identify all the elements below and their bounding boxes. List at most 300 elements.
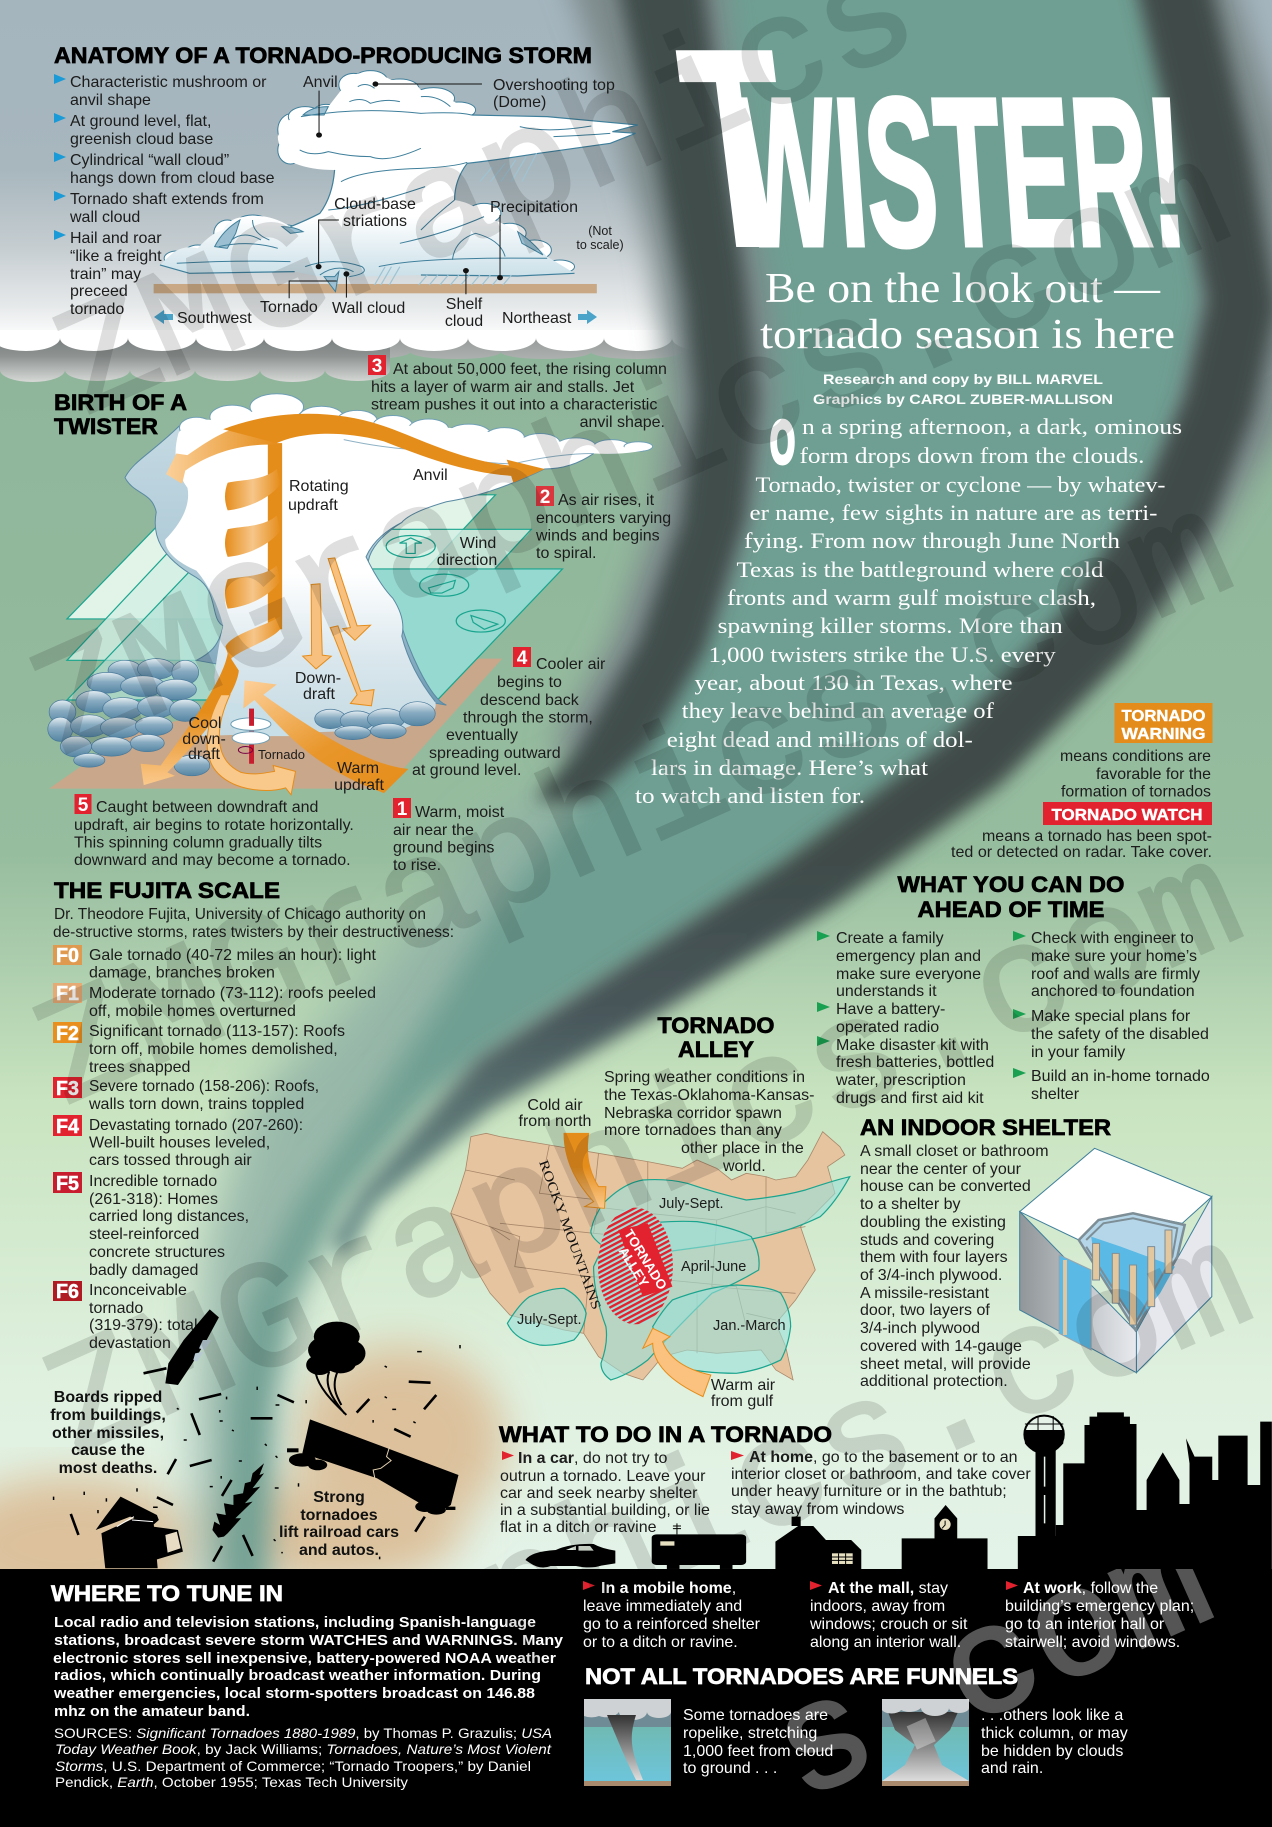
- icon: thick column tornado: [882, 1699, 969, 1786]
- panel: the Fujita scale: [53, 878, 454, 1352]
- F6: tornado: [89, 1300, 143, 1317]
- map: United States: [451, 1132, 850, 1397]
- caption: boards: from buildings,: [50, 1407, 166, 1424]
- F5: carried long distances,: [89, 1208, 249, 1225]
- intro story text: to watch and listen for.: [635, 783, 865, 808]
- diagram labels: striations: [343, 213, 407, 230]
- advice: at the mall: indoors, away from: [810, 1598, 945, 1615]
- text: indoor shelter: additional protection.: [860, 1373, 1008, 1390]
- step 1: air near the: [393, 822, 474, 839]
- text: thick column: [981, 1707, 1128, 1777]
- step 4: eventually: [446, 727, 518, 744]
- list column two: Build an in-home tornado: [1031, 1068, 1210, 1085]
- heading: tornado alley: ALLEY: [678, 1037, 754, 1062]
- caption: boards: most deaths.: [59, 1460, 157, 1477]
- text: ropelike: ropelike, stretching: [683, 1725, 817, 1742]
- advice: in a car: In a car, do not try to: [518, 1450, 668, 1467]
- subtitle: Be on the look out —: [765, 266, 1161, 312]
- list column two: in your family: [1031, 1044, 1125, 1061]
- diagram labels: Anvil: [413, 467, 448, 484]
- heading: birth of a twister: [54, 390, 187, 439]
- F6: F6: [56, 1281, 79, 1303]
- step 1: ground begins: [393, 840, 494, 856]
- list column one: Make disaster kit with: [836, 1037, 989, 1054]
- step 2: winds and begins: [535, 528, 660, 544]
- F6: devastation: [89, 1335, 171, 1352]
- map labels: [517, 1097, 786, 1410]
- panel: tornado warning and watch: means a tornado has been spot-: [982, 828, 1212, 845]
- watermark: ZMGraphics.com: [13, 466, 1258, 1147]
- map labels: Cold air: [527, 1097, 583, 1114]
- diagram labels: Tornado: [260, 299, 318, 316]
- F0: F0: [56, 945, 79, 967]
- list column two: roof and walls are firmly: [1031, 966, 1200, 983]
- map labels: from north: [519, 1113, 591, 1130]
- advice: in a car: car and seek nearby shelter: [500, 1485, 698, 1502]
- list column two: Make special plans for: [1031, 1008, 1191, 1025]
- step 3: [368, 355, 667, 431]
- heading: not all tornadoes: NOT ALL TORNADOES ARE FUNNELS: [585, 1664, 1018, 1689]
- F0: damage, branches broken: [89, 964, 275, 982]
- panel: anatomy of a tornado-producing storm: [54, 43, 638, 330]
- black footer band: [0, 1569, 1272, 1827]
- text: indoor shelter: to a shelter by: [860, 1196, 960, 1213]
- diagram labels: draft: [188, 746, 221, 763]
- bullet list: storm signs: Tornado shaft extends from: [70, 191, 264, 208]
- intro story text: spawning killer storms. More than: [718, 613, 1063, 638]
- advice: in a car: flat in a ditch or ravine: [500, 1519, 657, 1536]
- intro story text: n a spring afternoon, a dark, ominous: [802, 414, 1182, 439]
- step 5: This spinning column gradually tilts: [74, 834, 322, 852]
- map labels: July-Sept.: [517, 1312, 581, 1328]
- bullet list: storm signs: wall cloud: [69, 209, 140, 226]
- text: tornado alley: [604, 1069, 814, 1175]
- diagram labels: to scale): [576, 238, 624, 252]
- panel: tornado warning and watch: formation of tornados: [1061, 784, 1211, 800]
- intro story text: Tornado, twister or cyclone — by whatev-: [756, 472, 1166, 497]
- icon: ropelike tornado: [584, 1699, 671, 1786]
- bullet list: storm signs: greenish cloud base: [70, 131, 213, 148]
- F3: [53, 1077, 319, 1113]
- F2: torn off, mobile homes demolished,: [89, 1041, 338, 1058]
- F3: Severe tornado (158-206): Roofs,: [89, 1078, 319, 1095]
- text: indoor shelter: covered with 14-gauge: [860, 1338, 1022, 1355]
- panel: where to tune in: [51, 1581, 564, 1790]
- heading: birth of a twister: BIRTH OF A: [54, 390, 187, 415]
- text: tornado alley: Spring weather conditions in: [604, 1069, 805, 1086]
- intro story text: fronts and warm gulf moisture clash,: [727, 585, 1096, 610]
- F3: walls torn down, trains toppled: [88, 1096, 304, 1113]
- diagram labels: draft: [303, 686, 336, 703]
- panel: what to do in a tornado: [499, 1412, 1272, 1569]
- advice: in a car: [500, 1450, 710, 1536]
- step 3: hits a layer of warm air and stalls. Jet: [371, 379, 635, 396]
- step 4: [412, 647, 606, 779]
- F6: (319-379): total: [89, 1317, 198, 1334]
- intro text: [53, 906, 454, 941]
- F5: Incredible tornado: [89, 1173, 217, 1190]
- step 3: anvil shape.: [580, 414, 665, 431]
- diagram labels: direction: [437, 552, 497, 569]
- step 5: 5: [78, 795, 89, 816]
- panel: what you can do ahead of time: [817, 872, 1210, 1107]
- caption: boards: other missiles,: [52, 1425, 164, 1442]
- advice: at the mall: [809, 1580, 968, 1651]
- text: thick column: . . .others look like a: [981, 1707, 1123, 1724]
- F2: F2: [56, 1023, 79, 1045]
- intro story text: fying. From now through June North: [744, 528, 1120, 553]
- bullet list: storm signs: Cylindrical “wall cloud”: [70, 152, 229, 169]
- F1: F1: [56, 983, 79, 1005]
- bullet list: storm signs: Characteristic mushroom or: [70, 74, 267, 91]
- text: sources: Today Weather Book , by Jack Williams; Tornadoes, Nature’s Most Violent: [55, 1741, 552, 1757]
- advice: in a mobile home: leave immediately and: [583, 1598, 742, 1615]
- text: tornado alley: world.: [722, 1158, 766, 1175]
- map labels: ROCKY MOUNTAINS: [536, 1158, 604, 1311]
- step 4: spreading outward: [429, 745, 561, 762]
- advice: in a mobile home: [583, 1580, 761, 1651]
- advice: in a mobile home: or to a ditch or ravine.: [583, 1634, 738, 1651]
- bullet list: storm signs: train” may: [70, 266, 141, 283]
- heading: what you can do: [898, 872, 1124, 922]
- diagram labels: Overshooting top: [493, 77, 615, 94]
- credits: Research and copy by BILL MARVEL: [823, 371, 1104, 387]
- advice: at home: [731, 1449, 1031, 1518]
- F5: steel-reinforced: [89, 1226, 199, 1243]
- F5: badly damaged: [89, 1262, 198, 1279]
- text: indoor shelter: A missile-resistant: [860, 1285, 989, 1302]
- step 3: At about 50,000 feet, the rising column: [393, 361, 667, 378]
- advice: at home: stay away from windows: [731, 1501, 904, 1518]
- list column one: operated radio: [836, 1019, 939, 1036]
- credits: Graphics by CAROL ZUBER-MALLISON: [813, 391, 1113, 407]
- F0: Gale tornado (40-72 miles an hour): light: [89, 947, 377, 964]
- diagram: storm cloud cross-section: [154, 71, 638, 298]
- diagram labels: down-: [182, 731, 226, 748]
- list column two: Check with engineer to: [1031, 930, 1194, 947]
- step 3: stream pushes it out into a characteristic: [371, 396, 657, 414]
- F2: Significant tornado (113-157): Roofs: [89, 1023, 345, 1040]
- step 5: [74, 794, 354, 869]
- diagram labels: (Dome): [493, 94, 546, 111]
- intro story text: Texas is the battleground where cold: [736, 557, 1104, 582]
- text: indoor shelter: doubling the existing: [860, 1214, 1006, 1231]
- F5: concrete structures: [89, 1244, 225, 1261]
- heading: what to do: WHAT TO DO IN A TORNADO: [499, 1422, 832, 1447]
- intro story text: [635, 409, 1182, 808]
- list column two: make sure your home’s: [1031, 948, 1197, 965]
- text: indoor shelter: studs and covering: [860, 1232, 994, 1249]
- F4: cars tossed through air: [89, 1152, 252, 1169]
- bullet list: storm signs: [54, 74, 275, 318]
- advice: at work: stairwell; avoid windows.: [1005, 1634, 1180, 1651]
- tornado warning label: TORNADO: [1122, 708, 1206, 725]
- panel: birth of a twister: [48, 355, 671, 874]
- text: radio and television stations: Local radio and television stations, including Spanish-language: [54, 1614, 536, 1631]
- text: ropelike: [683, 1707, 833, 1777]
- text: indoor shelter: A small closet or bathroom: [860, 1143, 1049, 1160]
- advice: at the mall: windows; crouch or sit: [809, 1616, 968, 1633]
- text: ropelike: to ground . . .: [683, 1760, 777, 1777]
- heading: tornado alley: [658, 1013, 774, 1062]
- diagram labels: updraft: [288, 497, 338, 514]
- title: Twister!: [666, 0, 1192, 308]
- label on map: tornado alley: TORNADO: [621, 1227, 670, 1292]
- diagram labels: updraft: [334, 777, 384, 794]
- text: thick column: be hidden by clouds: [981, 1743, 1123, 1760]
- map labels: April-June: [681, 1259, 746, 1275]
- intro story text: O: [770, 409, 795, 476]
- step 1: to rise.: [393, 857, 441, 874]
- diagram: rotating storm: [48, 394, 653, 795]
- caption: boards: cause the: [71, 1442, 145, 1459]
- advice: in a car: outrun a tornado. Leave your: [500, 1468, 706, 1485]
- tornado warning label: [1114, 703, 1212, 743]
- diagram labels: Wind: [460, 535, 496, 552]
- illustration: flying debris: [50, 1309, 460, 1568]
- step 4: begins to: [497, 674, 562, 691]
- text: tornado alley: more tornadoes than any: [604, 1122, 782, 1139]
- credits: [813, 371, 1113, 407]
- list column two: [1013, 930, 1210, 1103]
- text: radio and television stations: electronic stores sell inexpensive, battery-powered NOAA weather: [53, 1650, 556, 1667]
- step 2: As air rises, it: [558, 492, 655, 509]
- text: sources: SOURCES: Significant Tornadoes 1880-1989 , by Thomas P. Grazulis; USA: [54, 1725, 552, 1741]
- intro story text: lars in damage. Here’s what: [651, 755, 928, 780]
- bullet list: storm signs: At ground level, flat,: [70, 113, 211, 130]
- diagram labels: [154, 74, 624, 330]
- step 4: 4: [517, 648, 528, 669]
- list column one: [817, 930, 994, 1107]
- list column one: water, prescription: [835, 1072, 966, 1089]
- diagram labels: Anvil: [303, 74, 338, 91]
- step 1: [393, 798, 505, 874]
- diagram labels: Warm: [337, 760, 379, 777]
- subtitle: tornado season is here: [760, 312, 1175, 358]
- F2: [53, 1022, 345, 1076]
- diagram labels: Rotating: [289, 478, 349, 495]
- F5: F5: [56, 1173, 79, 1195]
- panel: tornado warning and watch: ted or detected on radar. Take cover.: [951, 844, 1212, 861]
- heading: indoor shelter: AN INDOOR SHELTER: [860, 1115, 1111, 1140]
- F0: [53, 945, 377, 982]
- illustration: vehicles and city skyline: [525, 1412, 1272, 1569]
- text: radio and television stations: radios, which continually broadcast weather information. During: [54, 1667, 541, 1684]
- text: radio and television stations: weather emergencies, local storm-spotters broadcast on 146.88: [53, 1685, 535, 1702]
- tornado watch label: TORNADO WATCH: [1052, 807, 1202, 824]
- diagram labels: Tornado: [258, 747, 305, 762]
- text: sources: [54, 1725, 552, 1790]
- diagram labels: Wall cloud: [332, 300, 405, 317]
- advice: at the mall: along an interior wall.: [810, 1634, 961, 1651]
- text: indoor shelter: them with four layers: [860, 1249, 1008, 1266]
- watermark: phics.com: [452, 1198, 1272, 1692]
- diagram labels: Precipitation: [490, 199, 578, 216]
- diagram labels: Shelf: [446, 296, 483, 313]
- list column one: Have a battery-: [836, 1001, 945, 1018]
- text: indoor shelter: of 3/4-inch plywood.: [860, 1267, 1002, 1284]
- text: indoor shelter: door, two layers of: [860, 1302, 990, 1319]
- step 1: 1: [397, 799, 408, 820]
- tornado warning label: WARNING: [1122, 726, 1206, 743]
- F5: [53, 1172, 249, 1279]
- heading: Fujita scale: THE FUJITA SCALE: [54, 878, 280, 903]
- advice: at home: under heavy furniture or in the bathtub;: [731, 1483, 1007, 1500]
- advice: at work: [1005, 1580, 1194, 1651]
- advice: at home: interior closet or bathroom, and take cover: [731, 1466, 1031, 1483]
- intro text: de-structive storms, rates twisters by their destructiveness:: [53, 924, 454, 941]
- panel: tornado warning and watch: favorable for the: [1096, 766, 1211, 783]
- diagram labels: (Not: [588, 224, 612, 238]
- step 4: descend back: [480, 692, 580, 709]
- F2: trees snapped: [89, 1059, 190, 1076]
- F4: [53, 1115, 303, 1169]
- caption: boards: Boards ripped: [54, 1389, 162, 1406]
- step 4: through the storm,: [463, 710, 593, 726]
- text: radio and television stations: stations, broadcast severe storm WATCHES and WARNINGS. Many: [54, 1632, 564, 1649]
- advice: at the mall: At the mall, stay: [828, 1580, 948, 1597]
- list column one: Create a family: [836, 930, 944, 947]
- map labels: Warm air: [711, 1377, 776, 1394]
- text: thick column: and rain.: [981, 1760, 1043, 1777]
- intro story text: 1,000 twisters strike the U.S. every: [709, 642, 1056, 667]
- panel: tornado alley: [451, 1013, 850, 1410]
- panel: an indoor shelter: [860, 1115, 1212, 1390]
- F4: F4: [56, 1116, 80, 1138]
- F1: [53, 983, 376, 1020]
- diagram labels: Cool: [189, 715, 221, 732]
- icons: car, tree, train, house, pine and boards: [54, 1309, 460, 1568]
- intro story text: they leave behind an average of: [682, 698, 995, 723]
- intro story text: eight dead and millions of dol-: [667, 727, 973, 752]
- text: indoor shelter: house can be converted: [860, 1178, 1031, 1195]
- text: thick column: thick column, or may: [981, 1725, 1128, 1742]
- watermark: ZMGraphics.com: [23, 816, 1268, 1497]
- list column one: fresh batteries, bottled: [836, 1054, 994, 1071]
- intro story text: er name, few sights in nature are as terri-: [750, 500, 1158, 525]
- F4: Well-built houses leveled,: [89, 1134, 270, 1152]
- bullet list: storm signs: hangs down from cloud base: [70, 170, 275, 187]
- text: tornado alley: other place in the: [681, 1140, 804, 1157]
- list column one: drugs and first aid kit: [836, 1090, 984, 1107]
- panel: tornado warning and watch: [951, 703, 1212, 861]
- step 5: updraft, air begins to rotate horizontally.: [74, 817, 354, 834]
- advice: at work: At work, follow the: [1023, 1580, 1158, 1597]
- list column two: anchored to foundation: [1031, 983, 1195, 1000]
- diagram labels: Southwest: [177, 310, 252, 327]
- step 5: downward and may become a tornado.: [74, 852, 351, 869]
- text: indoor shelter: [860, 1143, 1049, 1390]
- watermark: ZMGraphics.com: [10, 116, 1255, 797]
- tornado funnel: [195, 0, 1272, 1600]
- label on map: tornado alley: ALLEY: [616, 1244, 652, 1290]
- text: indoor shelter: 3/4-inch plywood: [860, 1320, 980, 1337]
- list column one: emergency plan and: [836, 948, 981, 965]
- step 3: 3: [372, 356, 382, 377]
- step 2: encounters varying: [536, 510, 671, 527]
- heading: anatomy: ANATOMY OF A TORNADO-PRODUCING STORM: [54, 43, 592, 68]
- intro story text: year, about 130 in Texas, where: [694, 670, 1012, 695]
- text: radio and television stations: [53, 1614, 564, 1720]
- list column two: shelter: [1031, 1086, 1080, 1103]
- advice: at home: At home, go to the basement or to an: [749, 1449, 1018, 1466]
- text: radio and television stations: mhz on the amateur band.: [54, 1703, 250, 1720]
- text: tornado alley: the Texas-Oklahoma-Kansas-: [604, 1087, 814, 1104]
- F5: (261-318): Homes: [89, 1191, 218, 1208]
- F6: [53, 1281, 198, 1352]
- bullet list: storm signs: anvil shape: [70, 92, 151, 109]
- F6: Inconceivable: [89, 1282, 187, 1299]
- F3: F3: [56, 1078, 79, 1100]
- bullet list: storm signs: tornado: [70, 301, 124, 318]
- list column one: make sure everyone: [836, 966, 981, 983]
- caption: boards: [50, 1389, 166, 1477]
- step 1: Warm, moist: [415, 804, 505, 821]
- diagram labels: [182, 467, 497, 794]
- caption: railroad cars: and autos.: [299, 1542, 379, 1559]
- heading: what you can do: WHAT YOU CAN DO: [898, 872, 1124, 897]
- caption: railroad cars: tornadoes: [300, 1507, 378, 1524]
- text: tornado alley: Nebraska corridor spawn: [604, 1105, 782, 1122]
- intro story text: form drops down from the clouds.: [800, 443, 1144, 468]
- advice: at work: building’s emergency plan;: [1005, 1598, 1194, 1615]
- bullet list: storm signs: Hail and roar: [70, 230, 162, 247]
- advice: in a mobile home: go to a reinforced shelter: [583, 1616, 761, 1633]
- panel: not all tornadoes are funnels: [584, 1664, 1128, 1786]
- step 2: [535, 486, 671, 562]
- F1: off, mobile homes overturned: [89, 1003, 296, 1020]
- list column one: understands it: [836, 983, 937, 1000]
- diagram: shelter cutaway: [1020, 1148, 1212, 1373]
- text: indoor shelter: sheet metal, will provide: [860, 1356, 1031, 1373]
- tornado watch label: [1043, 802, 1212, 825]
- text: sources: Pendick, Earth, October 1955; Texas Tech University: [55, 1774, 408, 1790]
- step 4: Cooler air: [536, 656, 606, 673]
- text: indoor shelter: near the center of your: [860, 1161, 1022, 1178]
- caption: railroad cars: Strong: [313, 1489, 365, 1506]
- intro text: Dr. Theodore Fujita, University of Chicago authority on: [54, 906, 426, 923]
- bullet list: storm signs: preceed: [70, 283, 128, 300]
- step 2: 2: [540, 487, 550, 508]
- map labels: July-Sept.: [659, 1196, 723, 1212]
- diagram labels: Northeast: [502, 310, 572, 327]
- step 2: to spiral.: [536, 545, 596, 562]
- text: ropelike: 1,000 feet from cloud: [683, 1743, 833, 1760]
- list column two: the safety of the disabled: [1031, 1026, 1209, 1043]
- panel: tornado warning and watch: means conditions are: [1060, 748, 1211, 765]
- caption: railroad cars: lift railroad cars: [279, 1524, 399, 1541]
- map labels: Jan.-March: [713, 1318, 786, 1334]
- step 5: Caught between downdraft and: [96, 799, 318, 816]
- heading: what you can do: AHEAD OF TIME: [918, 897, 1104, 922]
- bullet list: storm signs: “like a freight: [70, 248, 162, 265]
- advice: at work: go to an interior hall or: [1005, 1616, 1165, 1633]
- text: sources: Storms , U.S. Department of Commerce; “Tornado Troopers,” by Daniel: [55, 1758, 531, 1774]
- heading: where to tune in: WHERE TO TUNE IN: [51, 1581, 283, 1606]
- step 4: at ground level.: [412, 762, 521, 779]
- advice: in a car: in a substantial building, or lie: [500, 1502, 710, 1519]
- advice: in a mobile home: In a mobile home,: [601, 1580, 736, 1597]
- diagram labels: cloud: [445, 313, 483, 330]
- heading: tornado alley: TORNADO: [658, 1013, 774, 1038]
- diagram labels: Cloud-base: [334, 196, 416, 213]
- diagram labels: Down-: [295, 670, 341, 687]
- map labels: from gulf: [711, 1393, 774, 1410]
- heading: birth of a twister: TWISTER: [54, 414, 158, 439]
- subtitle: [760, 266, 1175, 358]
- F1: Moderate tornado (73-112): roofs peeled: [89, 985, 376, 1002]
- caption: railroad cars: [279, 1489, 399, 1559]
